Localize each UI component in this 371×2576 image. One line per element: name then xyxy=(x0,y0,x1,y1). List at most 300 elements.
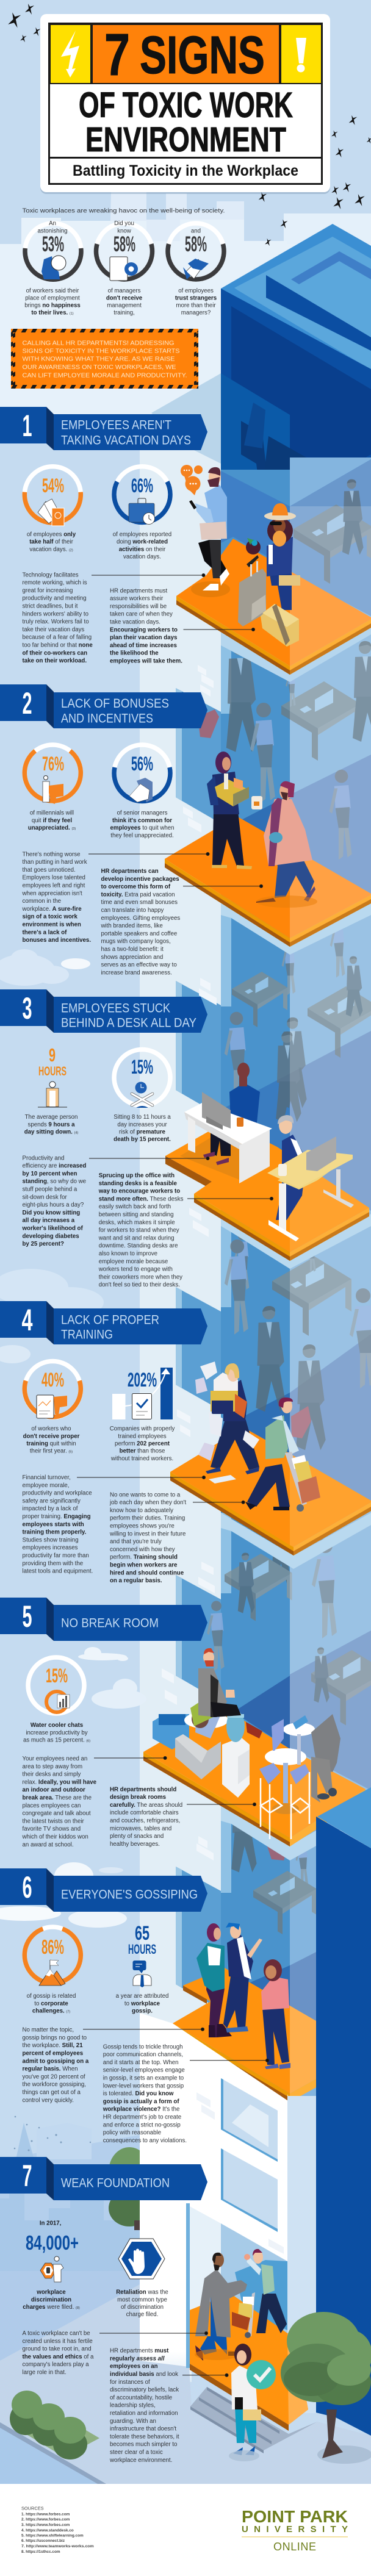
section 5 banner: 5 xyxy=(22,1599,32,1634)
stat: 58 percent of managers: training, xyxy=(113,310,135,316)
text: no matter the topic: things can get out of a xyxy=(22,2089,81,2096)
text: assess all employees: workplace environment. xyxy=(109,2457,172,2464)
text: no one wants: concerned with how they xyxy=(110,1546,175,1553)
text: fertile ground: A toxic workplace can't be xyxy=(22,2330,90,2337)
stat: 53 percent: place of employment xyxy=(25,295,80,301)
stat: 84,000 charges: workplace xyxy=(36,2289,66,2295)
text: gossip tends to trickle: HR department's job to create xyxy=(103,2114,181,2120)
caption: retaliation: Retaliation was the xyxy=(116,2289,168,2295)
title sign xyxy=(40,14,330,194)
text: standing desks: employee morale because xyxy=(99,1258,168,1265)
platform 1: vacation floor xyxy=(176,539,371,682)
text: nothing worse: environment is when xyxy=(22,921,81,928)
text: incentive packages: mugs with company logos, xyxy=(101,938,171,945)
text: no matter the topic: percent of employees xyxy=(22,2050,83,2057)
text: productivity and efficiency: efficiency are increased xyxy=(22,1163,86,1169)
text: gossip tends to trickle: gossip is actually a form of xyxy=(103,2098,179,2105)
text: technology facilitates: strict deadlines, but it xyxy=(22,603,78,610)
text: productivity and efficiency: standing, so why do we xyxy=(22,1179,86,1185)
stat: water cooler 15 percent: increase productivity by xyxy=(26,1729,88,1736)
text: productivity and efficiency: stuff people behind a xyxy=(22,1186,77,1193)
leader lines section 5 xyxy=(94,1757,256,1806)
text: nothing worse: than putting in hard work xyxy=(22,859,87,866)
section 4 banner: TRAINING xyxy=(61,1327,113,1342)
text: assess all employees: of accountability, hostile xyxy=(110,2394,172,2401)
text: standing desks: for workers to stand when they xyxy=(99,1227,179,1234)
stat: 53 percent: 53% xyxy=(42,232,64,256)
captions section 1: vacation days. xyxy=(123,553,161,560)
building: interior walls and floors xyxy=(221,457,371,2098)
platform 6: gossip floor xyxy=(173,1986,316,2102)
text: nothing worse: workplace. A sure-fire xyxy=(22,906,82,913)
text: assess all employees: for instances of xyxy=(110,2379,150,2386)
captions section 2: unappreciated. (3) xyxy=(28,825,76,831)
section 1 banner: EMPLOYEES AREN'T xyxy=(61,418,171,432)
person: man with red hair on green chair xyxy=(190,1648,262,1738)
logo: Point Park University Online xyxy=(242,2507,348,2553)
text: gossip tends to trickle: lower-level workers that gossip xyxy=(103,2083,184,2089)
text: HR departments must assure: the likelihood the xyxy=(110,650,159,657)
text: no matter the topic: admit to gossiping on a xyxy=(22,2058,89,2065)
stat: 58 percent of managers: don't receive xyxy=(106,295,143,301)
stat: 84,000 charges: 84,000+ xyxy=(26,2231,79,2254)
text: no matter the topic: control very quickly. xyxy=(22,2097,74,2104)
stat: 76 percent: 76% xyxy=(42,753,64,775)
stat: 58 percent of employees xyxy=(168,223,224,316)
text: your employees need: an indoor and outdoor xyxy=(22,1787,85,1793)
captions section 2: they feel unappreciated. xyxy=(110,832,174,839)
text: fertile ground: the values and ethics of a xyxy=(22,2353,93,2360)
text: design break rooms: and couches, refrigerators, xyxy=(110,1818,180,1824)
text: no one wants: know how to adequately xyxy=(110,1507,173,1514)
text: productivity and efficiency: by 25 percent? xyxy=(22,1241,64,1247)
stat: 53 percent: An xyxy=(49,220,56,227)
text: incentive packages: can translate into happy xyxy=(101,907,164,914)
stat: 84,000 charges: charges were filed. (8) xyxy=(23,2304,80,2311)
stat: 58 percent of managers: know xyxy=(117,228,132,234)
text: incentive packages: to overcome this form of xyxy=(101,884,171,891)
captions section 2: employees to quit when xyxy=(110,825,175,831)
captions section 2: of senior managers xyxy=(117,810,168,817)
text: standing desks: workers tend to engage with xyxy=(98,1266,173,1273)
clouds xyxy=(0,949,146,2271)
text: your employees need: the latest twists on their xyxy=(22,1818,85,1824)
text: gossip tends to trickle: workplace violence? It's the xyxy=(103,2106,179,2113)
text: nothing worse: Employers lose talented xyxy=(22,875,85,881)
text: gossip tends to trickle: is tolerated. Did you know xyxy=(103,2090,173,2097)
section 7 banner: 7 xyxy=(22,2159,32,2193)
big tree xyxy=(281,2312,371,2458)
text: assess all employees: individual basis and look xyxy=(110,2371,178,2378)
text: incentive packages: serves as an effective way to xyxy=(101,962,177,969)
text: assess all employees: infrastructure that doesn't xyxy=(110,2426,176,2433)
text: incentive packages: toxicity. Extra paid vacation xyxy=(101,891,175,898)
person: man in hoodie on phone xyxy=(189,467,230,597)
text: HR departments must assure: Encouraging workers to xyxy=(110,626,178,633)
text: standing desks: also known to improve xyxy=(99,1250,157,1257)
text: incentive packages: time and even small bonuses xyxy=(101,899,178,906)
stat: 202 percent xyxy=(112,1368,173,1419)
stat: 53 percent: astonishing xyxy=(37,228,68,234)
stat: 66 percent xyxy=(114,467,170,525)
text: productivity and efficiency: by 10 percent when xyxy=(22,1171,77,1177)
text: technology facilitates: take on their workload. xyxy=(22,658,87,664)
captions section 4: trained employees xyxy=(118,1433,167,1440)
person: man in grey coat xyxy=(195,2253,247,2361)
text: HR departments must assure: assure workers their xyxy=(110,595,164,602)
captions section 4: of workers who xyxy=(31,1426,71,1432)
title sign: SIGNS xyxy=(140,26,265,85)
text: technology facilitates: take their vacation days xyxy=(22,626,84,633)
stat: 84,000 charges: In 2017, xyxy=(40,2220,62,2226)
captions section 3 xyxy=(24,1114,171,1143)
text: no one wants: on a regular basis. xyxy=(110,1577,162,1584)
section 1 banner: TAKING VACATION DAYS xyxy=(61,433,191,448)
captions section 4: training quit within xyxy=(26,1440,76,1447)
text: nothing worse: sign of a toxic work xyxy=(22,914,78,920)
stat: 58 percent of managers: management xyxy=(107,303,142,309)
stat: 58 percent of employees: managers? xyxy=(181,310,211,316)
text: gossip tends to trickle: senior-level employees engage xyxy=(103,2067,185,2074)
person: traveler with luggage xyxy=(238,503,300,647)
section 2 banner: LACK OF BONUSES xyxy=(61,697,169,711)
text: productivity and efficiency: sit-down desk for xyxy=(22,1194,67,1200)
stat: 58 percent of managers xyxy=(96,220,153,316)
sources list: 8. https://1sthcc.com xyxy=(21,2550,60,2554)
text: HR departments must assure: employees will take them. xyxy=(110,658,182,665)
stat: 202 percent: 202% xyxy=(128,1369,157,1391)
text: technology facilitates: productivity and meeting xyxy=(22,595,87,602)
text: no one wants: perform. Training should xyxy=(110,1554,178,1561)
section 2 banner: 2 xyxy=(22,686,32,720)
stat: 9 hours: 9 xyxy=(49,1044,56,1066)
text: gossip tends to trickle: policy with reasonable xyxy=(103,2129,161,2136)
right building block and side wedge xyxy=(316,1787,371,2436)
stat: 54 percent: 54% xyxy=(42,475,64,497)
platform 2: bonuses floor xyxy=(165,816,371,955)
text: financial turnover: safety are significantly xyxy=(22,1498,81,1504)
captions section 3: risk of premature xyxy=(119,1128,166,1136)
section 4 banner xyxy=(0,1301,207,1344)
text: no one wants: hired and should continue xyxy=(110,1570,184,1576)
text: your employees need: their desks and simply xyxy=(22,1771,81,1778)
stat: water cooler 15 percent: 15% xyxy=(46,1665,68,1687)
speech bubbles xyxy=(181,465,203,495)
text: gossip tends to trickle: and it starts at the top. When xyxy=(103,2059,179,2066)
sources list: 2. https://www.forbes.com xyxy=(21,2517,70,2522)
text: financial turnover: employee morale, xyxy=(22,1482,70,1489)
people gossiping xyxy=(196,1923,290,2069)
text: financial turnover: productivity far more than xyxy=(22,1552,89,1559)
text: assess all employees: leadership styles, xyxy=(110,2402,156,2409)
platform 4: training floor xyxy=(170,1427,371,1569)
text: HR departments must assure: take vacation days. xyxy=(110,619,160,626)
stat: 58 percent of managers: Did you xyxy=(114,220,134,227)
captions section 6: to workplace xyxy=(124,2000,160,2007)
captions section 4: Companies with properly xyxy=(110,1426,175,1432)
wall brick marks xyxy=(162,665,217,1860)
text: design break rooms: carefully. The areas should xyxy=(110,1802,182,1809)
text: technology facilitates: too far behind or that none xyxy=(22,642,93,649)
stat: 54 percent xyxy=(24,467,81,526)
building: roof and top facade xyxy=(151,224,371,506)
stat: 65 hours xyxy=(128,1922,156,1987)
text: financial turnover: employees starts with xyxy=(22,1521,84,1528)
text: productivity and efficiency: all day increases a xyxy=(22,1218,75,1224)
captions section 3: The average person xyxy=(25,1114,77,1121)
building: side rooms xyxy=(176,610,231,2010)
text: technology facilitates: because of a fear of falling xyxy=(22,634,92,641)
text: nothing worse: employees left and right xyxy=(22,882,85,889)
logo: Point Park University Online: POINT PARK xyxy=(242,2507,348,2526)
white building facade and windows xyxy=(140,2013,316,2413)
text: financial turnover: employees increases xyxy=(22,1545,78,1551)
stat: water cooler 15 percent: Water cooler chats xyxy=(31,1722,83,1729)
stat: 9 hours xyxy=(38,1044,67,1107)
person: woman in white coat with checkmark xyxy=(229,2344,276,2461)
callout: HR departments: CALLING ALL HR DEPARTMENTS! ADDRESSING xyxy=(22,340,175,346)
stat: 40 percent xyxy=(24,1362,81,1418)
stat: 53 percent: of workers said their xyxy=(26,288,79,294)
text: productivity and efficiency: worker's likelihood of xyxy=(22,1225,83,1232)
section 1 banner xyxy=(0,407,207,450)
text: your employees need: which of their kiddos won xyxy=(22,1834,88,1840)
text: nothing worse: when appreciation isn't xyxy=(22,890,82,897)
sources list xyxy=(21,2506,94,2554)
text: HR departments must assure: ahead of time increases xyxy=(110,642,177,649)
text: incentive packages: increase brand awareness. xyxy=(101,969,172,976)
icon: stop hand hexagon xyxy=(118,2239,165,2279)
logo: Point Park University Online: ONLINE xyxy=(273,2541,316,2553)
text: financial turnover: productivity and workplace xyxy=(22,1490,92,1497)
text: incentive packages: HR departments can xyxy=(101,868,159,875)
text: financial turnover: latest tools and equipment. xyxy=(22,1568,93,1575)
entrance: door wall and orange floor xyxy=(186,2203,308,2431)
text: technology facilitates: of their co-workers can xyxy=(22,650,87,656)
captions section 1: take half of their xyxy=(29,539,74,545)
text: your employees need: area to step away from xyxy=(22,1763,82,1770)
text: no one wants: begin when workers are xyxy=(110,1562,178,1569)
stat: 86 percent xyxy=(24,1927,81,1986)
title sign: ENVIRONMENT xyxy=(85,120,286,159)
bushes on grass xyxy=(10,2391,99,2459)
captions section 3: death by 15 percent. xyxy=(113,1136,171,1143)
text: gossip tends to trickle: and enforce a strict no-gossip xyxy=(103,2122,181,2128)
ghost office workers: lower floors xyxy=(207,1231,371,1934)
text: technology facilitates: hinders workers' ability to xyxy=(22,611,88,617)
section 2 banner: AND INCENTIVES xyxy=(61,711,153,726)
text: no matter the topic: regular basis. When xyxy=(22,2066,78,2073)
text: productivity and efficiency: eight-plus hours a day? xyxy=(22,1202,84,1208)
text: no matter the topic: gossip brings no good to xyxy=(22,2034,87,2041)
text: assess all employees: HR departments must xyxy=(110,2348,168,2355)
text: incentive packages: portable speakers and coffee xyxy=(101,930,177,937)
text: assess all employees: employees on an xyxy=(110,2363,158,2370)
text: no one wants: job each day when they don't xyxy=(109,1499,186,1506)
sources list: 6. https://usconnect.biz xyxy=(21,2539,65,2543)
person and yellow standing desk xyxy=(267,1115,354,1241)
stat: 58 percent of employees: trust strangers xyxy=(175,295,217,301)
callout: HR departments: SIGNS OF TOXICITY IN THE WORKPLACE STARTS xyxy=(22,348,180,355)
captions section 1: vacation days. (2) xyxy=(29,546,73,553)
text: your employees need: places employees can xyxy=(22,1803,81,1809)
section 6 banner: 6 xyxy=(22,1870,32,1904)
stat: 9 hours: HOURS xyxy=(38,1064,67,1078)
text: financial turnover: Studies show training xyxy=(22,1537,79,1543)
break room furniture xyxy=(153,1708,315,1839)
text: standing desks: downtime. Standing desks are xyxy=(99,1243,178,1249)
text: design break rooms: plenty of snacks and xyxy=(110,1833,164,1840)
text: standing desks: don't feel so tied to their desks. xyxy=(99,1282,180,1288)
intro sentence: Toxic workplaces are wreaking havoc on the well-being of society. xyxy=(22,207,225,215)
stat: 40 percent: 40% xyxy=(41,1369,64,1391)
text: HR departments must assure: plan their vacation days xyxy=(110,634,177,641)
text: technology facilitates: great for increasing xyxy=(22,587,73,594)
text: incentive packages: with branded items, like xyxy=(100,923,163,930)
stat: 84,000 charges: discrimination xyxy=(31,2297,71,2303)
text: your employees need: an award at school. xyxy=(22,1842,74,1848)
captions section 3: day sitting down. (4) xyxy=(24,1128,78,1136)
callout: HR departments: CAN LIFT EMPLOYEE MORALE AND PRODUCTIVITY. xyxy=(22,372,187,379)
captions section 1: doing work-related xyxy=(117,539,168,545)
text: standing desks: their coworkers more when they xyxy=(99,1274,182,1280)
text: financial turnover: impacted by a lack of xyxy=(22,1505,78,1512)
text: standing desks: standing desks is a feasible xyxy=(99,1180,177,1187)
text: standing desks: Sprucing up the office with xyxy=(99,1172,175,1179)
section 5 banner xyxy=(0,1598,207,1641)
captions section 4: without trained workers. xyxy=(110,1455,173,1462)
section 4 banner: 4 xyxy=(22,1303,33,1337)
captions section 4: perform 202 percent xyxy=(115,1440,170,1447)
text: no one wants: No one wants to come to a xyxy=(110,1491,181,1498)
text: standing desks: between sitting and standing xyxy=(99,1211,173,1218)
stat: 65 hours: HOURS xyxy=(128,1942,156,1957)
text: design break rooms: microwaves, tables and xyxy=(110,1825,171,1832)
text: no matter the topic: the workplace. Still, 21 xyxy=(22,2042,83,2049)
leader lines section 4 xyxy=(77,1476,245,1504)
section 1 banner: 1 xyxy=(22,409,32,443)
section 7 banner xyxy=(0,2157,207,2200)
captions section 1: activities on their xyxy=(119,546,166,553)
person: man high-fiving with trolley xyxy=(232,2249,287,2338)
section 6 banner xyxy=(0,1868,207,1912)
person and white standing desk xyxy=(184,1063,272,1183)
text: incentive packages: employees. Gifting employees xyxy=(101,915,180,922)
stat: 58 percent of employees: of employees xyxy=(178,288,214,294)
text: technology facilitates: remote working, which is xyxy=(22,579,87,586)
text: gossip tends to trickle: Gossip tends to trickle through xyxy=(103,2043,183,2050)
section 2 banner xyxy=(0,684,207,728)
leader lines section 2 xyxy=(88,853,262,888)
text: HR departments must assure: taken care of when they xyxy=(110,611,173,618)
text: standing desks: want and sit and relax during xyxy=(98,1235,175,1241)
captions section 3: day increases your xyxy=(117,1121,167,1128)
text: standing desks: way to encourage workers to xyxy=(98,1188,180,1195)
platform 5: break room floor xyxy=(143,1707,366,1860)
text: technology facilitates: Technology facilitates xyxy=(22,572,79,578)
title sign: 7 xyxy=(104,21,130,88)
light overlay on right of building xyxy=(290,506,371,1824)
small tree behind section seven xyxy=(109,2141,189,2245)
ghost office workers: top floors xyxy=(198,479,371,1122)
captions section 1: of employees only xyxy=(27,531,76,538)
callout: HR departments: WITH KNOWING WHAT THEY ARE. AS WE RAISE xyxy=(22,356,175,362)
text: gossip tends to trickle: consequences to any violations. xyxy=(103,2137,187,2144)
caption: retaliation: most common type xyxy=(117,2297,167,2303)
text: productivity and efficiency: developing diabetes xyxy=(22,1233,79,1240)
section 3 banner: 3 xyxy=(22,991,32,1025)
captions section 2: quit if they feel xyxy=(32,817,72,824)
title sign: Battling Toxicity in the Workplace xyxy=(73,162,298,179)
person: man in pink coat xyxy=(251,781,317,908)
text: no one wants: perform their duties. Training xyxy=(110,1515,185,1522)
text: HR departments must assure: HR departments must xyxy=(110,587,168,594)
section 5 banner: NO BREAK ROOM xyxy=(61,1616,159,1630)
text: technology facilitates: truly relax. Workers fail to xyxy=(22,619,89,625)
text: design break rooms: design break rooms xyxy=(110,1794,166,1801)
person: man with trolley xyxy=(245,1397,320,1512)
stat: 53 percent: brings no happiness xyxy=(24,303,81,309)
text: financial turnover: providing them with the xyxy=(22,1560,83,1567)
leader lines section 3 xyxy=(89,1157,273,1200)
callout: HR departments xyxy=(11,329,198,389)
sources list: 7. http://www.teamworks-works.com xyxy=(21,2544,94,2549)
text: fertile ground: large role in that. xyxy=(22,2369,67,2376)
text: assess all employees: discriminatory beliefs, lack xyxy=(110,2387,179,2394)
person: man standing in grey suit xyxy=(311,1714,340,1803)
text: no one wants: willing to invest in their future xyxy=(109,1530,186,1537)
captions section 6: of gossip is related xyxy=(27,1993,76,2000)
sources list: 1. https://www.forbes.com xyxy=(21,2512,70,2517)
text: nothing worse: there's a lack of xyxy=(22,929,67,936)
stat: 15 percent sitting xyxy=(114,1049,170,1108)
captions section 3: Sitting 8 to 11 hours a xyxy=(113,1114,171,1121)
section 7 banner: WEAK FOUNDATION xyxy=(61,2176,170,2190)
text: your employees need: relax. Ideally, you will have xyxy=(22,1779,96,1785)
captions section 6: challenges. (7) xyxy=(32,2008,70,2014)
text: financial turnover: Financial turnover, xyxy=(22,1474,71,1481)
captions section 6 xyxy=(27,1993,168,2014)
text: productivity and efficiency: Productivity and xyxy=(22,1155,64,1161)
text: fertile ground: ground to take root in, and xyxy=(22,2346,92,2353)
section 6 banner: EVERYONE'S GOSSIPING xyxy=(61,1887,198,1902)
text: standing desks: desks, which makes it simple xyxy=(99,1219,175,1226)
ground and road xyxy=(0,2271,371,2484)
caption: retaliation: charge filed. xyxy=(126,2311,158,2318)
title sign: OF TOXIC WORK xyxy=(79,85,293,125)
captions section 3: spends 9 hours a xyxy=(27,1121,75,1128)
stat: water cooler 15 percent: as much as 15 percent. (6) xyxy=(23,1737,90,1743)
entrance steps xyxy=(190,2387,317,2453)
stat: 56 percent xyxy=(114,745,170,802)
captions section 4: better than those xyxy=(120,1448,165,1454)
text: fertile ground: created unless it has fertile xyxy=(22,2338,93,2345)
text: your employees need: congregate and talk about xyxy=(22,1810,91,1817)
person: woman carrying a box xyxy=(207,752,252,869)
text: gossip tends to trickle: in gossip, it sets an example to xyxy=(103,2075,184,2081)
captions section 6: a year are attributed xyxy=(116,1993,168,2000)
captions section 2 xyxy=(28,810,175,839)
captions section 6: gossip. xyxy=(132,2008,153,2014)
captions section 6: to corporate xyxy=(34,2000,68,2007)
leader lines section 1 xyxy=(92,573,255,631)
stat: 58 percent of managers: of managers xyxy=(108,288,141,294)
text: incentive packages: shows appreciation and xyxy=(101,954,163,961)
section 3 banner xyxy=(0,989,207,1033)
text: assess all employees: retaliation and information xyxy=(110,2410,178,2417)
text: assess all employees: becomes much simpler to xyxy=(110,2441,177,2448)
stat: 53 percent: to their lives. (1) xyxy=(31,310,74,316)
